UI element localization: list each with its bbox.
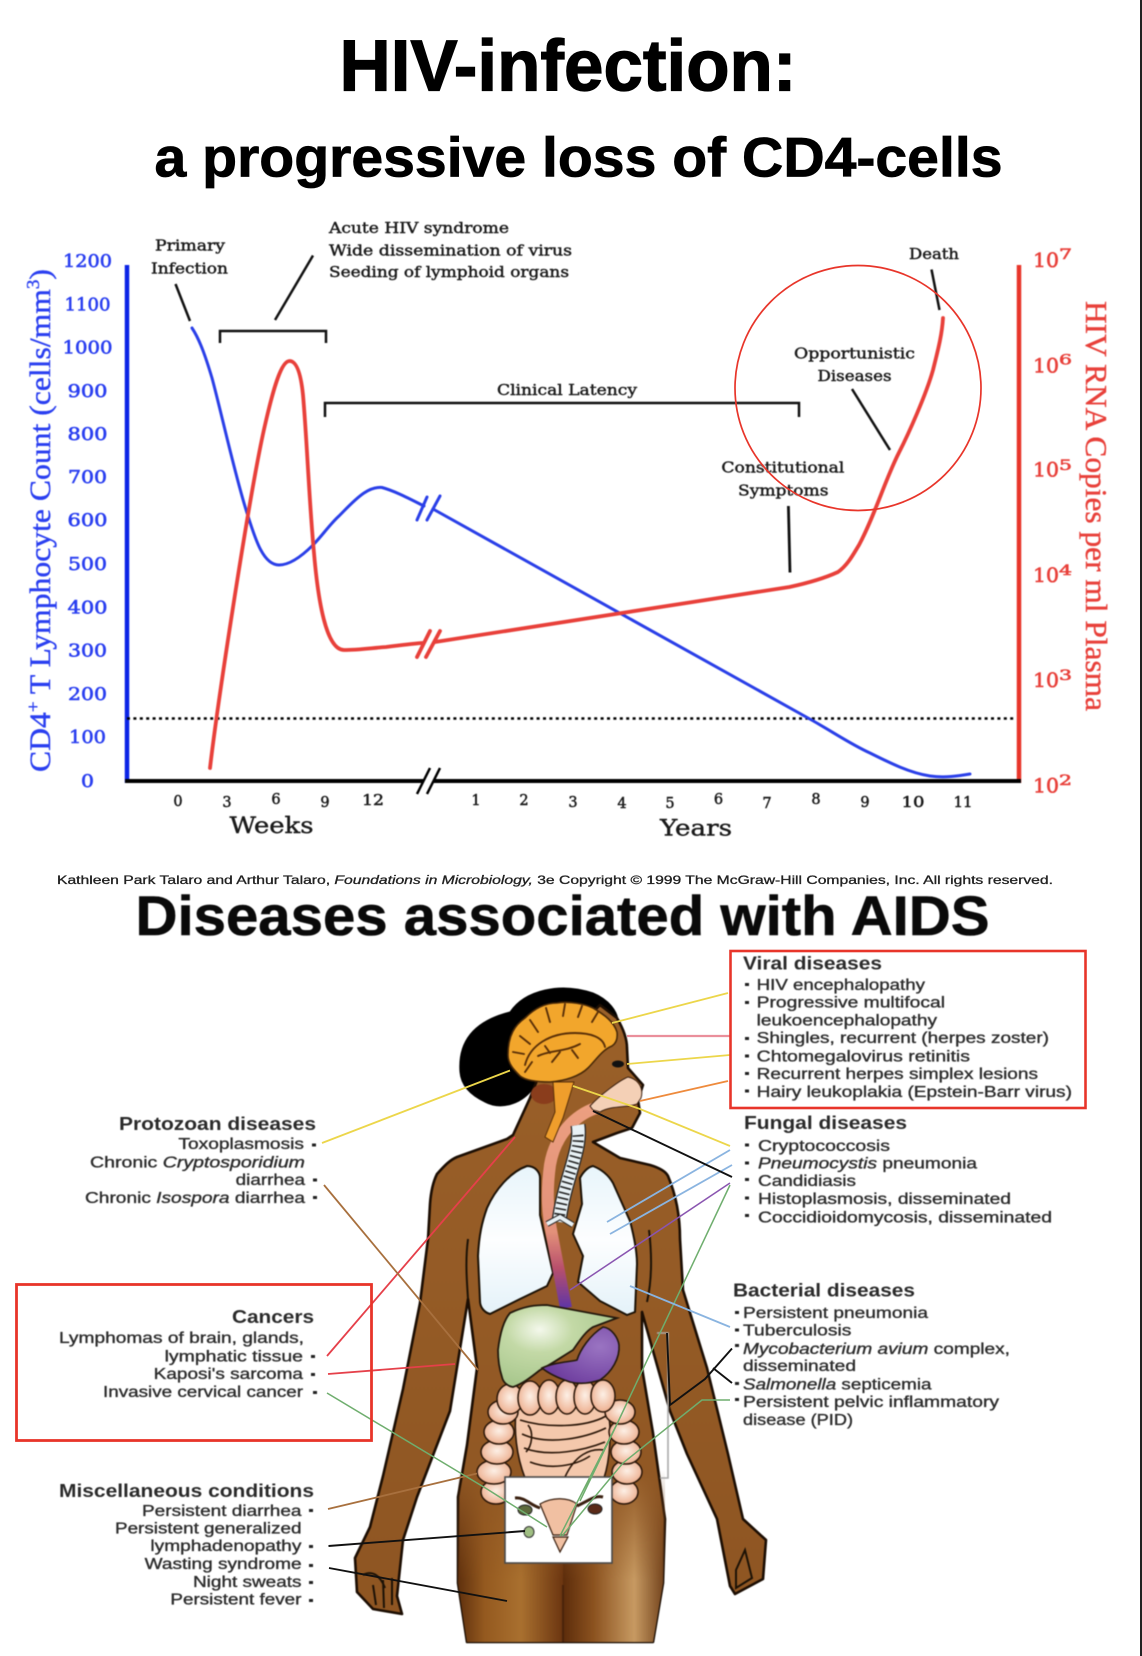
list: cancers: Kaposi's sarcoma: [154, 1366, 303, 1383]
leader: acute syndrome: [275, 256, 313, 320]
list: bacterial diseases: Persistent pelvic inflammatory: [743, 1394, 999, 1411]
list: fungal diseases: Fungal diseases: [744, 1113, 907, 1133]
subtitle: a progressive loss of CD4-cells: a progressive loss of CD4-cells: [154, 126, 1002, 189]
brain: [508, 1002, 617, 1082]
right axis: HIV RNA scale: 10: [1033, 354, 1059, 378]
list: bacterial diseases: disease (PID): [743, 1412, 853, 1429]
left axis: CD4 count scale: 0: [81, 772, 94, 792]
list: bacterial diseases: Bacterial diseases: [733, 1280, 915, 1300]
chart: CD4 count and HIV RNA over time: [23, 219, 1114, 842]
right axis: HIV RNA scale: 7: [1059, 247, 1072, 263]
x axis with break: 8: [811, 792, 821, 808]
label: acute HIV syndrome: Seeding of lymphoid organs: [329, 263, 569, 281]
list: cancers: [59, 1307, 317, 1401]
list: viral diseases: HIV encephalopathy: [757, 977, 925, 994]
list: cancers: lymphatic tissue: [165, 1348, 303, 1366]
arm creases: [363, 1230, 752, 1642]
label: constitutional symptoms: Symptoms: [738, 482, 828, 500]
list: viral diseases: Shingles, recurrent (herpes zoster): [757, 1030, 1049, 1047]
nasal cavity: [590, 1077, 642, 1112]
brown leaders: [324, 1185, 478, 1509]
right axis title: HIV RNA Copies per ml Plasma: [1079, 301, 1114, 711]
hair: [460, 988, 618, 1106]
list: fungal diseases: Histoplasmosis, disseminated: [758, 1191, 1011, 1208]
right axis: HIV RNA scale: 3: [1059, 668, 1072, 684]
red box: viral diseases: [730, 951, 1086, 1108]
list: protozoan diseases: Chronic Isospora diarrhea: [85, 1190, 305, 1207]
list: miscellaneous conditions: [59, 1481, 314, 1609]
esophagus: [548, 1108, 596, 1308]
left axis: CD4 count scale: 1200: [63, 252, 112, 272]
list: viral diseases: Viral diseases: [743, 954, 882, 974]
leader: constitutional symptoms: [788, 506, 790, 572]
list: viral diseases: Recurrent herpes simplex lesions: [757, 1066, 1038, 1083]
green leaders: [327, 1185, 730, 1536]
brainstem: [545, 1082, 574, 1142]
list: fungal diseases: Candidiasis: [758, 1173, 856, 1190]
list: protozoan diseases: Protozoan diseases: [119, 1114, 316, 1134]
x axis with break: 7: [762, 796, 772, 812]
leader lines to the disease lists: [322, 993, 732, 1601]
left axis title: T Lymphocyte Count (cells/mm: [24, 289, 57, 701]
gray bracket at right hip: [657, 1333, 668, 1478]
x axis with break: 3: [568, 795, 578, 811]
stomach: [542, 1327, 619, 1383]
list: protozoan diseases: Toxoplasmosis: [178, 1136, 304, 1153]
leader: primary infection: [176, 284, 190, 321]
list: viral diseases: Hairy leukoplakia (Epstein-Barr virus): [757, 1084, 1072, 1101]
body silhouette: [355, 1005, 766, 1642]
small intestine: [515, 1402, 610, 1478]
x axis with break: [125, 768, 1021, 842]
label: constitutional symptoms: Constitutional: [721, 459, 845, 477]
right axis: HIV RNA scale: 4: [1059, 563, 1072, 579]
red curve: HIV RNA: [210, 318, 943, 768]
blue curve: CD4 count: [192, 328, 970, 777]
x axis with break: 10: [902, 795, 924, 811]
list: miscellaneous conditions: Wasting syndrome: [145, 1556, 302, 1573]
x axis with break: 12: [362, 793, 384, 809]
right axis: HIV RNA scale: 10: [1033, 774, 1059, 798]
list: miscellaneous conditions: Persistent fever: [170, 1592, 301, 1609]
x axis with break: 0: [173, 794, 183, 810]
left axis: CD4 count scale: 800: [68, 425, 108, 445]
left axis title: 3: [23, 280, 43, 289]
x axis with break: 9: [860, 795, 870, 811]
red box: cancers: [16, 1284, 372, 1440]
blue leaders: [607, 1150, 732, 1327]
label: acute HIV syndrome: [328, 219, 572, 281]
label: primary infection: [151, 236, 228, 278]
bracket: acute phase: [220, 331, 326, 343]
left axis title: ): [24, 269, 57, 280]
right axis: HIV RNA scale: [1019, 247, 1114, 798]
left axis: CD4 count scale: 900: [68, 382, 108, 402]
leader: opportunistic diseases: [852, 389, 890, 450]
orange leader: [640, 1081, 728, 1101]
x axis with break: 1: [471, 793, 481, 809]
x axis label: Weeks: Weeks: [230, 814, 314, 839]
left axis: CD4 count scale: 700: [68, 468, 107, 488]
right axis: HIV RNA scale: 2: [1059, 773, 1072, 789]
list: miscellaneous conditions: lymphadenopathy: [150, 1538, 302, 1555]
list: viral diseases: Progressive multifocal: [757, 995, 945, 1012]
list: miscellaneous conditions: Persistent generalized: [115, 1521, 302, 1538]
left axis: CD4 count scale: 500: [68, 555, 107, 575]
red circle highlight: [735, 266, 981, 510]
label: primary infection: Primary: [155, 236, 226, 254]
purple leader: [570, 1183, 730, 1290]
list: fungal diseases: Coccidioidomycosis, disseminated: [758, 1209, 1052, 1226]
title: HIV-infection: HIV-infection:: [340, 26, 796, 106]
list: bacterial diseases: Salmonella septicemia: [743, 1376, 932, 1394]
uterus: [540, 1499, 577, 1535]
threshold dotted line: [127, 717, 1015, 720]
list: bacterial diseases: Mycobacterium avium complex,: [743, 1341, 1010, 1358]
heading: Diseases associated with AIDS: Diseases associated with AIDS: [136, 884, 990, 947]
label: opportunistic diseases: [794, 345, 915, 385]
list: viral diseases: Chtomegalovirus retinitis: [757, 1048, 970, 1066]
list: fungal diseases: [744, 1113, 1052, 1226]
inset: reproductive organs: [505, 1477, 612, 1563]
pink leader: [627, 1035, 730, 1037]
leader: death: [932, 270, 940, 310]
right axis: HIV RNA scale: 10: [1033, 668, 1059, 692]
list: miscellaneous conditions: Night sweats: [193, 1574, 302, 1591]
x axis with break: 4: [617, 796, 627, 812]
left axis: CD4 count scale: 400: [68, 599, 108, 619]
left axis: CD4 count scale: 1100: [64, 296, 110, 316]
x axis with break: 9: [320, 795, 330, 811]
label: death: Death: [909, 245, 959, 263]
red leaders: [327, 1137, 515, 1374]
list: miscellaneous conditions: Persistent diarrhea: [142, 1503, 302, 1520]
left axis title: +: [23, 701, 43, 712]
x axis with break: 6: [714, 792, 723, 808]
bracket: clinical latency: [325, 403, 799, 417]
copyright line: Kathleen Park Talaro and Arthur Talaro, Foundations in Microbiology, 3e Copyright © 1999 The McGraw-Hill Companies, Inc. All rights reserved.: [57, 873, 1053, 887]
cerebellum: [531, 1084, 557, 1104]
list: bacterial diseases: Tuberculosis: [743, 1323, 852, 1340]
label: opportunistic diseases: Diseases: [818, 367, 892, 385]
right edge border: [1140, 0, 1142, 1656]
left axis: CD4 count scale: 300: [68, 642, 107, 662]
left axis: CD4 count scale: 1000: [62, 339, 112, 359]
list: cancers: Cancers: [232, 1307, 314, 1327]
list: bacterial diseases: Persistent pneumonia: [743, 1305, 928, 1322]
x axis with break: 2: [519, 793, 529, 809]
label: acute HIV syndrome: Wide dissemination of virus: [329, 242, 572, 260]
right axis: HIV RNA scale: 10: [1033, 458, 1059, 482]
list: protozoan diseases: Chronic Cryptosporidium: [90, 1155, 305, 1172]
large intestine: [477, 1380, 642, 1504]
list: protozoan diseases: diarrhea: [236, 1172, 305, 1189]
list: bacterial diseases: disseminated: [743, 1358, 856, 1375]
list: viral diseases: [743, 954, 1072, 1101]
right axis: HIV RNA scale: 6: [1059, 353, 1072, 369]
list: cancers: Invasive cervical cancer: [103, 1384, 303, 1401]
x axis with break: 3: [222, 795, 232, 811]
list: protozoan diseases: [85, 1114, 317, 1207]
list: bacterial diseases: [733, 1280, 1010, 1429]
trachea: [547, 1125, 579, 1225]
left axis title: CD4: [24, 715, 57, 772]
liver: [498, 1305, 617, 1387]
left axis: CD4 count scale: 200: [68, 685, 107, 705]
label: primary infection: Infection: [151, 260, 228, 278]
label: acute HIV syndrome: Acute HIV syndrome: [328, 219, 509, 237]
list: viral diseases: leukoencephalopathy: [757, 1012, 937, 1030]
list: cancers: Lymphomas of brain, glands,: [59, 1330, 304, 1347]
lungs: [478, 1166, 637, 1315]
x axis label: Years: Years: [659, 816, 732, 842]
black leaders: [328, 1111, 732, 1601]
left axis: CD4 count scale: 600: [68, 511, 108, 531]
label: constitutional symptoms: [721, 459, 845, 500]
label: clinical latency: Clinical Latency: [497, 381, 638, 399]
list: fungal diseases: Pneumocystis pneumonia: [758, 1156, 977, 1173]
thighs shading: [458, 1460, 665, 1642]
x axis with break: 5: [665, 796, 675, 812]
right axis: HIV RNA scale: 10: [1033, 563, 1059, 587]
list: fungal diseases: Cryptococcosis: [758, 1138, 890, 1155]
yellow leaders: [322, 993, 730, 1146]
x axis with break: 6: [271, 792, 281, 808]
eye: [612, 1060, 624, 1068]
left axis: CD4 count scale: [23, 252, 127, 792]
right axis: HIV RNA scale: 10: [1033, 248, 1059, 272]
right axis: HIV RNA scale: 5: [1059, 458, 1072, 474]
list: miscellaneous conditions: Miscellaneous conditions: [59, 1481, 314, 1501]
x axis with break: 11: [954, 795, 972, 811]
body illustration: [355, 988, 766, 1642]
left axis: CD4 count scale: 100: [69, 728, 106, 748]
label: opportunistic diseases: Opportunistic: [794, 345, 915, 363]
